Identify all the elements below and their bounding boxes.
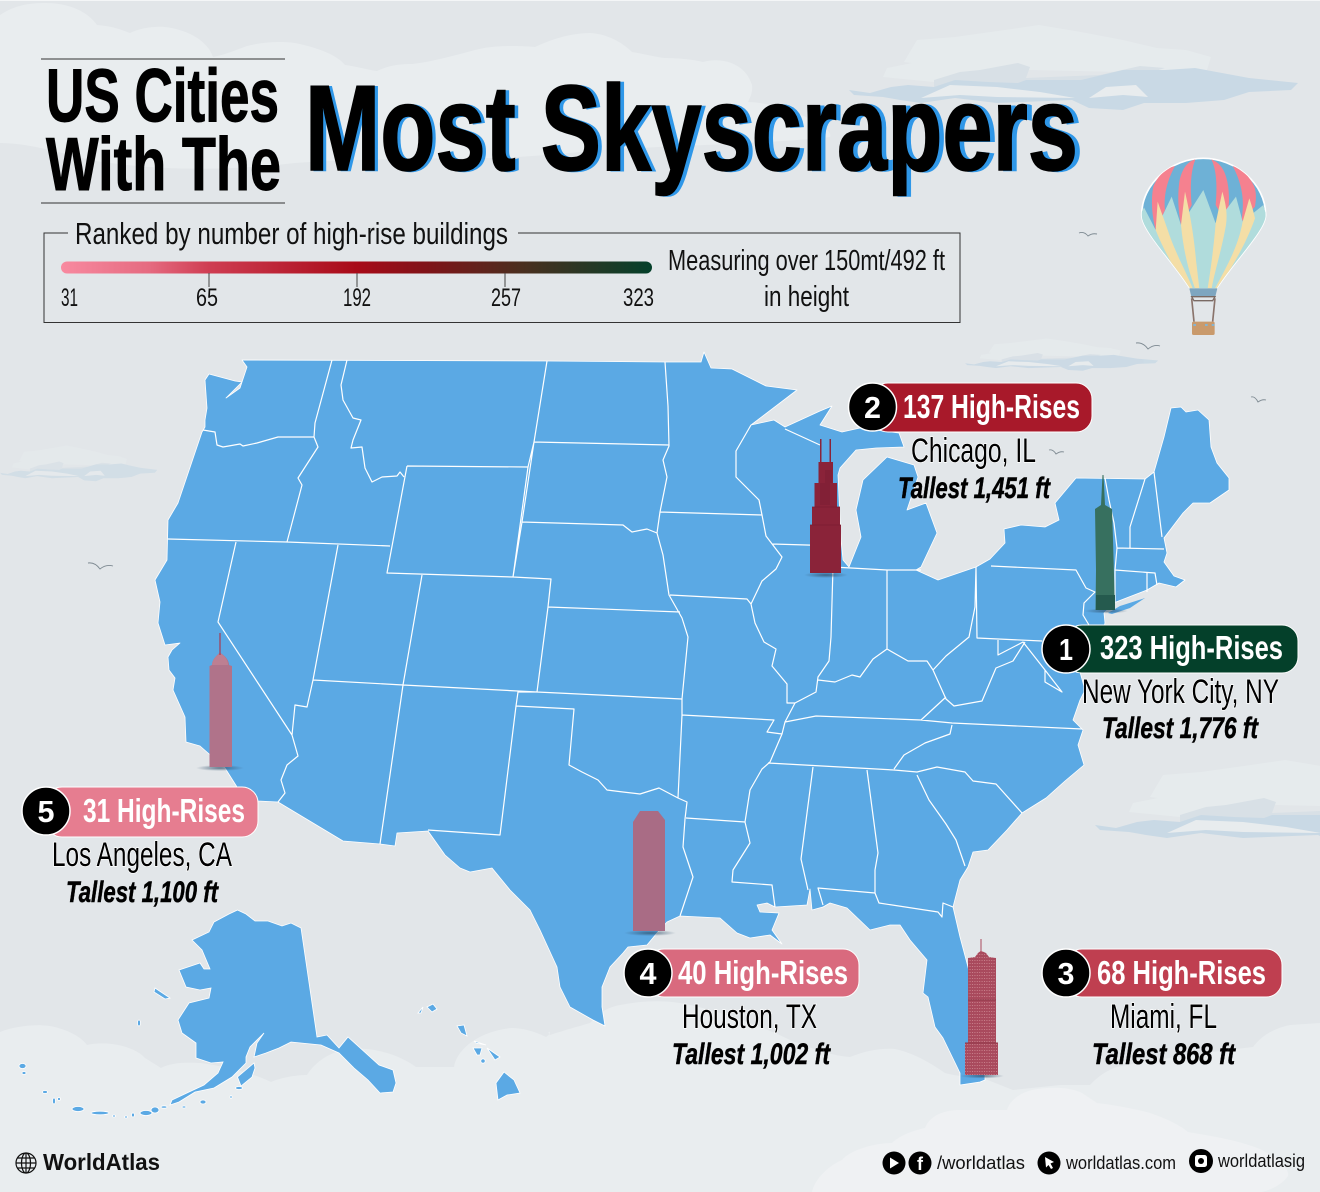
social links: worldatlasig [1217,1151,1305,1171]
callout 3: Miami: Tallest 868 ft [1092,1038,1237,1071]
pill: 323 high-rises [1066,625,1298,673]
legend note: Measuring over 150mt/492 ft [668,245,945,277]
callout 4: Houston: Tallest 1,002 ft [672,1038,832,1071]
map: Long Island [1108,598,1145,614]
callout 4: Houston: 40 High-Rises [678,954,848,991]
callout 5: Los Angeles: 5 [38,794,54,829]
callout 3: Miami: Miami, FL [1110,998,1217,1036]
icon: globe [16,1153,36,1173]
title: US Cities With The: US Cities [46,54,279,138]
callout 2: Chicago: 137 High-Rises [903,388,1080,425]
icon: facebook [908,1152,932,1174]
birds [88,232,1266,569]
pill: 40 high-rises [648,949,859,997]
icon: facebook: f [917,1154,924,1174]
color scale bar [61,262,652,274]
scale labels: 257 [491,284,521,312]
title: US Cities With The: With The [46,122,281,206]
map: Alaska [19,910,396,1118]
map: Hawaii [418,1004,520,1100]
callout 1: New York City: Tallest 1,776 ft [1102,712,1260,745]
social links: /worldatlas [937,1153,1025,1173]
legend note [668,245,945,313]
skyscraper: Miami [960,939,1004,1078]
pill: 31 high-rises [46,787,258,837]
skyscraper: New York City [1084,475,1128,614]
callout 1: New York City [1042,625,1298,745]
map: contiguous United States [155,352,1229,1085]
pill: 68 high-rises [1066,949,1282,997]
legend panel [44,216,960,322]
rank badge 4 [624,949,672,997]
rank badge 2 [848,383,896,431]
icon: cursor [1038,1152,1060,1174]
callout 3: Miami: 68 High-Rises [1097,954,1266,991]
legend heading: Ranked by number of high-rise buildings [75,216,508,251]
callout 3: Miami: 3 [1058,956,1074,991]
title: Most Skyscrapers: Most Skyscrapers [305,60,1078,196]
rank badge 3 [1042,949,1090,997]
callout 5: Los Angeles: 31 High-Rises [83,792,245,829]
callout 2: Chicago: 2 [864,390,881,425]
callout 2: Chicago: Tallest 1,451 ft [898,472,1051,505]
callout 5: Los Angeles: Tallest 1,100 ft [66,876,219,909]
title: US Cities With The [41,54,285,206]
scale ticks [209,273,505,287]
scale labels [61,284,654,312]
scale labels: 31 [61,284,78,312]
rank badge 5 [22,787,70,835]
scale labels: 323 [623,284,654,312]
callout 2: Chicago [848,383,1092,505]
map: state borders [168,360,1164,917]
skyscraper: Chicago [804,439,848,578]
callout 5: Los Angeles [22,787,258,909]
scale labels: 65 [196,284,218,312]
social links: worldatlas.com [1065,1153,1176,1173]
legend note: in height [764,281,849,313]
social links [882,1149,1305,1174]
callout 1: New York City: 1 [1059,632,1073,667]
callout 4: Houston [624,949,859,1071]
rank badge 1 [1042,625,1090,673]
logo: WorldAtlas: WorldAtlas [43,1149,160,1175]
callout 5: Los Angeles: Los Angeles, CA [52,836,232,874]
skyscraper: Los Angeles [196,633,244,771]
skyscraper: Houston [624,811,676,936]
icon: instagram [1189,1149,1213,1173]
icon: youtube [882,1152,906,1174]
scale labels: 192 [343,284,371,312]
icon: hot air balloon [1140,158,1267,335]
pill: 137 high-rises [872,383,1092,432]
callout 4: Houston: Houston, TX [682,998,817,1036]
callout 2: Chicago: Chicago, IL [911,432,1036,470]
callout 4: Houston: 4 [640,956,657,991]
callout 3: Miami [1042,949,1282,1071]
